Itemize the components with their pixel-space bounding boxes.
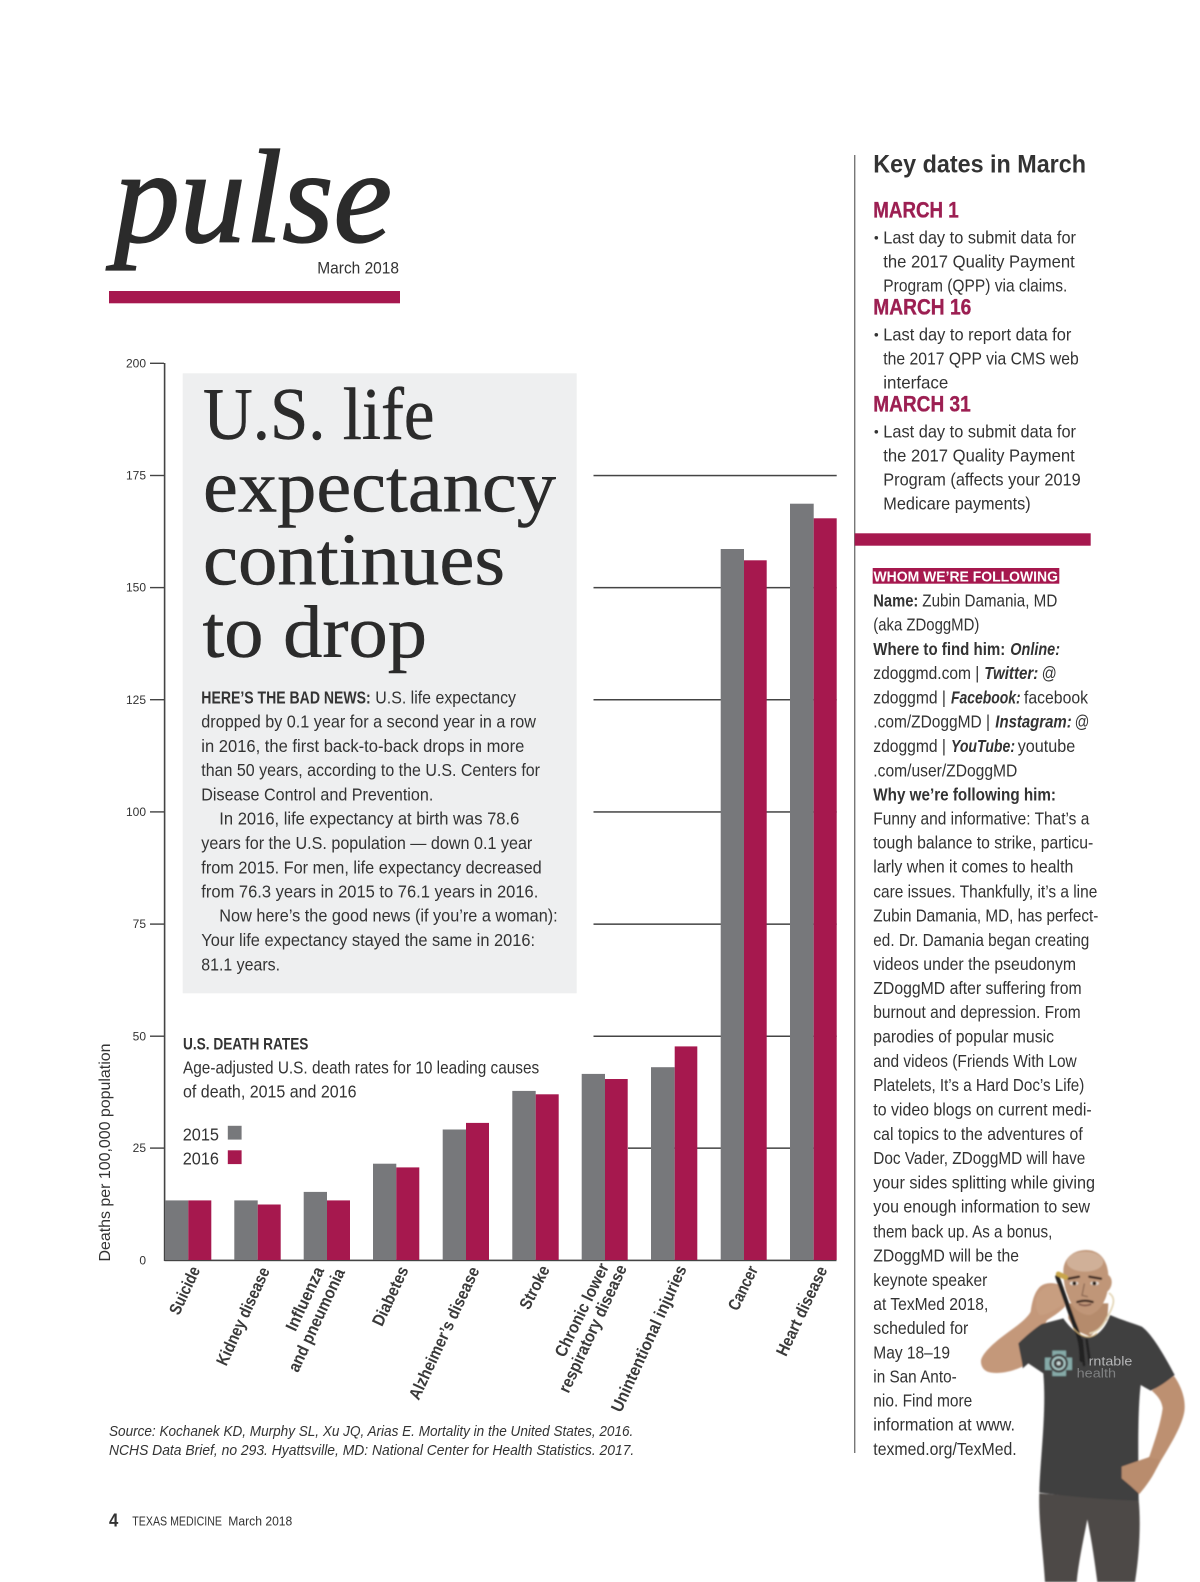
date: March 16: interface (883, 372, 948, 392)
x axis line (164, 1260, 836, 1261)
profile details: zdoggmd.com | (873, 663, 979, 683)
chart: U.S. death rates bar chart (97, 356, 837, 1415)
profile body text: and videos (Friends With Low (873, 1051, 1077, 1071)
date: March 1: the 2017 Quality Payment (883, 251, 1075, 271)
article body: 81.1 years. (201, 954, 280, 974)
profile details: YouTube: (951, 736, 1015, 756)
profile details: Why we’re following him: (873, 784, 1056, 804)
masthead date: March 2018 (317, 259, 399, 277)
shirt logo (1045, 1351, 1072, 1376)
y axis tick labels: 150 (126, 581, 146, 595)
x axis category labels: Chronic lower (551, 1260, 613, 1360)
profile details (873, 590, 1089, 804)
y axis tick labels (126, 356, 146, 1268)
profile body text: ed. Dr. Damania began creating (873, 930, 1089, 950)
profile body text: burnout and depression. From (873, 1002, 1081, 1022)
chart description: of death, 2015 and 2016 (183, 1081, 356, 1101)
profile body text: parodies of popular music (873, 1027, 1054, 1047)
stethoscope (1057, 1274, 1113, 1365)
x axis category labels: Heart disease (772, 1263, 831, 1359)
article body: than 50 years, according to the U.S. Centers for (201, 760, 540, 780)
profile body text: Platelets, It’s a Hard Doc’s Life) (873, 1075, 1084, 1095)
headline (202, 374, 556, 674)
x axis category labels: respiratory disease (555, 1262, 631, 1396)
y axis tick labels: 100 (126, 805, 146, 819)
chart legend: 2016 (183, 1148, 219, 1168)
y axis tick labels: 175 (126, 469, 146, 483)
x axis category labels: Diabetes (368, 1263, 413, 1329)
masthead red rule (109, 291, 400, 303)
article body: in 2016, the first back-to-back drops in more (201, 736, 524, 756)
shirt lettering: health (1077, 1366, 1116, 1380)
gridlines (594, 475, 837, 1149)
y axis tick labels: 25 (133, 1141, 146, 1155)
profile body text: ZDoggMD will be the (873, 1245, 1019, 1265)
date: March 31: the 2017 Quality Payment (883, 445, 1075, 465)
date: March 31: Medicare payments) (883, 493, 1031, 513)
hand on hip (1122, 1457, 1159, 1494)
profile details: facebook (1024, 688, 1088, 708)
source note: NCHS Data Brief, no 293. Hyattsville, MD: National Center for Health Statistics. 2017. (109, 1442, 634, 1459)
profile details: .com/user/ZDoggMD (873, 760, 1017, 780)
headline: U.S. life (203, 374, 434, 456)
profile body text: at TexMed 2018, (873, 1294, 988, 1314)
sidebar: whom we're following (873, 568, 1098, 1459)
article body: years for the U.S. population — down 0.1 year (201, 833, 532, 853)
face features (1068, 1277, 1101, 1305)
section label: WHOM WE’RE FOLLOWING (874, 568, 1058, 585)
footer: TEXAS MEDICINE (132, 1513, 222, 1528)
profile body text: in San Anto- (873, 1366, 957, 1386)
date: March 31: Program (affects your 2019 (883, 469, 1081, 489)
x axis category labels (165, 1260, 831, 1415)
footer: March 2018 (228, 1513, 292, 1528)
profile body text (873, 808, 1098, 1459)
profile details: Online: (1010, 639, 1060, 659)
profile body text: information at www. (873, 1415, 1015, 1435)
headline: to drop (202, 592, 427, 674)
masthead: pulse: pulse (106, 122, 392, 270)
article body: dropped by 0.1 year for a second year in a row (201, 712, 536, 732)
y axis tick labels: 0 (139, 1254, 146, 1268)
profile details: Twitter: (984, 663, 1038, 683)
y axis ticks (150, 363, 164, 1149)
profile body text: texmed.org/TexMed. (873, 1439, 1017, 1459)
y axis tick labels: 75 (133, 917, 146, 931)
fingers on stethoscope (1036, 1285, 1064, 1315)
profile body text: tough balance to strike, particu- (873, 833, 1093, 853)
headline: expectancy (203, 447, 556, 529)
source note: Source: Kochanek KD, Murphy SL, Xu JQ, Arias E. Mortality in the United States, 2016. (109, 1423, 633, 1440)
illustration: portrait of ZDoggMD (981, 1250, 1185, 1582)
sidebar red rule (855, 533, 1091, 546)
profile body text: your sides splitting while giving (873, 1172, 1095, 1192)
source note (109, 1423, 634, 1459)
date: March 16: MARCH 16 (873, 295, 971, 320)
chart legend: 2015 (183, 1124, 219, 1144)
sidebar vertical rule (854, 155, 855, 1453)
profile details: Instagram: (995, 712, 1072, 732)
date: March 31: Last day to submit data for (883, 421, 1076, 441)
profile details: Facebook: (951, 688, 1021, 708)
date: March 16: the 2017 QPP via CMS web (883, 348, 1079, 368)
raised arm (981, 1283, 1065, 1373)
x axis category labels: Cancer (724, 1263, 762, 1313)
y axis title: Deaths per 100,000 population (97, 1044, 114, 1262)
chart description: Age-adjusted U.S. death rates for 10 leading causes (183, 1058, 539, 1078)
article body (201, 687, 558, 974)
x axis category labels: Suicide (165, 1263, 204, 1318)
date: March 1 (873, 198, 1076, 295)
profile body text: ZDoggMD after suffering from (873, 978, 1082, 998)
y axis tick labels: 200 (126, 356, 146, 370)
profile body text: Doc Vader, ZDoggMD will have (873, 1148, 1085, 1168)
profile details: @ (1075, 712, 1089, 732)
y axis tick labels: 125 (126, 693, 146, 707)
profile details: Name: (873, 590, 918, 610)
profile body text: Funny and informative: That’s a (873, 808, 1090, 828)
date: March 31: MARCH 31 (873, 392, 971, 417)
x axis category labels: and pneumonia (284, 1265, 349, 1375)
bars 2016 (188, 518, 837, 1260)
pants (1039, 1493, 1140, 1582)
profile details: @ (1042, 663, 1057, 683)
eyes (1070, 1281, 1099, 1285)
date: March 16 (873, 295, 1079, 392)
profile body text: May 18–19 (873, 1342, 950, 1362)
date: March 1: MARCH 1 (873, 198, 959, 223)
headline: continues (203, 519, 505, 601)
sidebar heading: Key dates in March (873, 150, 1086, 178)
article body: Now here’s the good news (if you’re a woman): (219, 906, 558, 926)
profile details: youtube (1018, 736, 1075, 756)
profile details: Where to find him: (873, 639, 1005, 659)
chart legend (183, 1124, 242, 1168)
profile body text: videos under the pseudonym (873, 954, 1076, 974)
x axis category labels: Stroke (516, 1262, 554, 1313)
date: March 16: Last day to report data for (883, 324, 1071, 344)
profile body text: scheduled for (873, 1318, 968, 1338)
article body: Disease Control and Prevention. (201, 785, 433, 805)
date: March 31 (873, 392, 1081, 513)
profile body text: larly when it comes to health (873, 857, 1073, 877)
profile body text: keynote speaker (873, 1270, 987, 1290)
profile body text: Zubin Damania, MD, has perfect- (873, 905, 1098, 925)
panel: life expectancy article (183, 373, 577, 993)
profile details: Zubin Damania, MD (922, 590, 1057, 610)
neck (1068, 1303, 1108, 1337)
bars 2015 (165, 504, 814, 1260)
date: March 1: Program (QPP) via claims. (883, 275, 1067, 295)
panel background (183, 373, 577, 993)
x axis category labels: Influenza (282, 1263, 328, 1334)
head (1063, 1250, 1112, 1315)
photo body (981, 1250, 1185, 1582)
profile body text: them back up. As a bonus, (873, 1221, 1052, 1241)
profile body text: you enough information to sew (873, 1196, 1090, 1216)
scalp highlight (1067, 1252, 1103, 1272)
profile body text: cal topics to the adventures of (873, 1124, 1083, 1144)
profile details: zdoggmd | (873, 736, 946, 756)
article body: Your life expectancy stayed the same in 2016: (201, 930, 535, 950)
profile body text: nio. Find more (873, 1390, 972, 1410)
left arm on hip (1122, 1376, 1185, 1493)
chart description (183, 1058, 539, 1101)
y axis line (164, 363, 165, 1261)
t-shirt (1018, 1315, 1175, 1501)
y axis tick labels: 50 (133, 1029, 146, 1043)
x axis category labels: Alzheimer’s disease (405, 1264, 483, 1403)
profile body text: to video blogs on current medi- (873, 1099, 1092, 1119)
x axis category labels: Kidney disease (213, 1264, 274, 1368)
footer: 4 (109, 1510, 118, 1530)
article body: U.S. life expectancy (375, 687, 516, 707)
date: March 1: Last day to submit data for (883, 227, 1076, 247)
article body: In 2016, life expectancy at birth was 78.6 (219, 809, 519, 829)
sidebar: key dates in March (873, 150, 1086, 513)
profile details: (aka ZDoggMD) (873, 614, 979, 634)
x axis category labels: Unintentional injuries (607, 1262, 691, 1415)
footer (109, 1510, 292, 1530)
profile details: zdoggmd | (873, 688, 946, 708)
article body: HERE’S THE BAD NEWS: (201, 687, 371, 707)
shirt lettering (1077, 1355, 1132, 1380)
article body: from 2015. For men, life expectancy decreased (201, 857, 542, 877)
profile body text: care issues. Thankfully, it’s a line (873, 881, 1097, 901)
article body: from 76.3 years in 2015 to 76.1 years in 2016. (201, 882, 538, 902)
profile details: .com/ZDoggMD | (873, 712, 990, 732)
shirt lettering: rntable (1089, 1355, 1132, 1369)
chart title: U.S. death rates: U.S. DEATH RATES (183, 1035, 308, 1053)
